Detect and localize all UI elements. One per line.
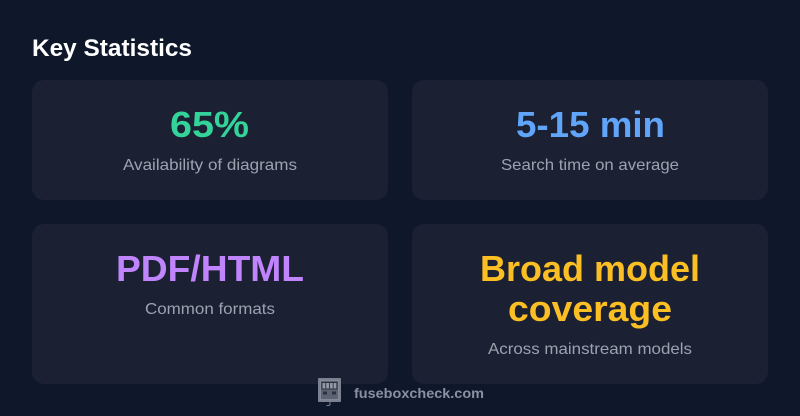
stat label: search time: Search time on average	[501, 157, 679, 174]
stat label: models: Across mainstream models	[488, 341, 692, 358]
stat value: 5-15 min: 5-15 min	[516, 104, 665, 145]
panel: availability stat	[32, 80, 388, 200]
stat label: formats: Common formats	[145, 301, 275, 318]
stat value: broad model coverage: coverage	[508, 288, 672, 329]
stat value: PDF/HTML: PDF/HTML	[116, 248, 304, 289]
stat value: broad model coverage	[480, 248, 700, 329]
stat value: 65%: 65%	[170, 104, 249, 145]
panel: model coverage stat	[412, 224, 768, 384]
footer logo and site name	[318, 378, 484, 406]
title: Key Statistics	[32, 35, 192, 62]
stat value: broad model coverage: Broad model	[480, 248, 700, 289]
site name: fuseboxcheck.com	[354, 385, 484, 401]
icon: fuse box	[318, 378, 341, 406]
panel: formats stat	[32, 224, 388, 384]
stat label: availability: Availability of diagrams	[123, 157, 297, 174]
panel: search time stat	[412, 80, 768, 200]
